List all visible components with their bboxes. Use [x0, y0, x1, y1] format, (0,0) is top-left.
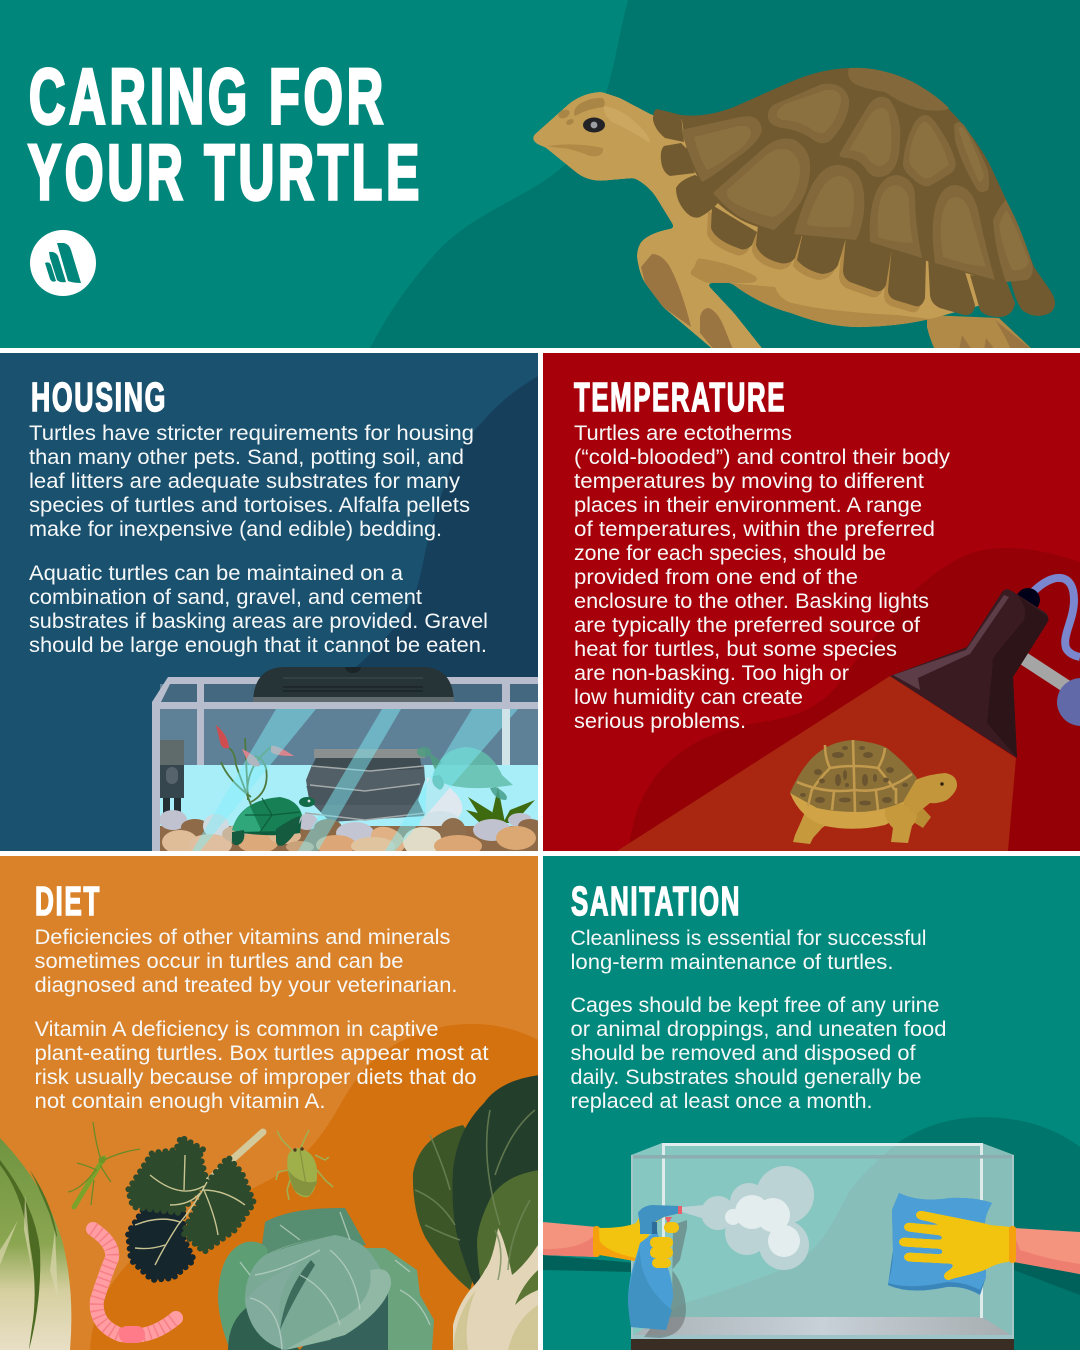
fingers — [650, 1222, 679, 1268]
lamp arm — [1020, 652, 1075, 696]
lamp cord — [1033, 578, 1080, 657]
tortoise head, neck and body — [533, 92, 1000, 352]
diet text block: Deficiencies of other vitamins and minerals — [34, 926, 450, 949]
tortoise limbs — [793, 806, 830, 844]
title: CARING FOR — [29, 52, 387, 140]
bok choy back leaf — [452, 1075, 540, 1303]
aquarium front frame — [152, 702, 538, 851]
illustration: glass tank — [631, 1143, 1014, 1350]
shell — [681, 68, 1034, 282]
small tortoise — [790, 740, 957, 844]
panel: diet — [0, 856, 540, 1350]
rock cave — [305, 749, 425, 822]
sanitation background shape — [640, 1117, 1080, 1350]
temperature background shape — [630, 548, 1080, 851]
panel: housing — [0, 353, 542, 858]
housing text block: should be large enough that it cannot be eaten. — [29, 634, 487, 657]
aquarium back glass — [160, 684, 538, 765]
bottle shadow — [644, 1220, 687, 1338]
spray bottle with gloved hand — [543, 1205, 687, 1338]
fern — [466, 787, 535, 823]
housing text block: make for inexpensive (and edible) bedding. — [29, 518, 442, 541]
diet text block: not contain enough vitamin A. — [34, 1090, 326, 1113]
sanitation text block: should be removed and disposed of — [570, 1042, 916, 1065]
temperature text block: are non-basking. Too high or — [574, 662, 849, 685]
table — [631, 1339, 1014, 1350]
lamp shade — [890, 589, 1048, 758]
bok choy front leaf — [477, 1170, 540, 1310]
cleaning cloth — [888, 1193, 992, 1295]
right gloved hand — [903, 1215, 1080, 1279]
eye — [583, 118, 605, 132]
tortoise head — [903, 773, 957, 815]
lamp joint — [1057, 678, 1080, 726]
illustration: napa cabbage — [0, 1138, 71, 1350]
right post highlight — [502, 709, 510, 765]
diet text block: Vitamin A deficiency is common in captive — [34, 1018, 438, 1041]
right arm shadow — [1014, 1255, 1080, 1295]
glove palm and fingers — [903, 1215, 1012, 1279]
kale upper leaves — [128, 1137, 207, 1213]
tank floor — [631, 1317, 1014, 1337]
teal turtle behind glass — [417, 747, 513, 800]
housing text block: species of turtles and tortoises. Alfalfa pellets — [29, 494, 470, 517]
tank glass body — [631, 1143, 1014, 1339]
marginal scute shadows — [707, 211, 922, 312]
light beams — [192, 709, 518, 851]
shell scutes inner — [694, 90, 1029, 270]
tortoise shell — [790, 740, 917, 812]
left arm shadow — [543, 1255, 636, 1272]
temperature text block: zone for each species, should be — [574, 542, 886, 565]
temperature text block: heat for turtles, but some species — [574, 638, 897, 661]
diet text block — [34, 926, 489, 1113]
sanitation text block: Cleanliness is essential for successful — [570, 927, 926, 950]
temperature text block: low humidity can create — [574, 686, 803, 709]
glove cuff — [1009, 1226, 1016, 1263]
green turtle — [232, 797, 315, 846]
temperature text block: Turtles are ectotherms — [574, 422, 792, 445]
diet text block: diagnosed and treated by your veterinarian. — [34, 974, 458, 997]
illustration: large tortoise — [533, 68, 1055, 352]
sanitation text block: daily. Substrates should generally be — [570, 1066, 922, 1089]
sanitation text block: long-term maintenance of turtles. — [570, 951, 894, 974]
aquarium back frame — [152, 677, 538, 765]
bottle body — [628, 1230, 673, 1330]
housing text block: Turtles have stricter requirements for housing — [29, 422, 474, 445]
sanitation text block: Cages should be kept free of any urine — [570, 994, 940, 1017]
bottle head — [638, 1205, 680, 1234]
spray cloud — [682, 1166, 814, 1270]
kale stem — [207, 1132, 263, 1182]
illustration: kale leaf — [128, 1132, 263, 1280]
header panel — [0, 0, 1080, 352]
housing text block: Aquatic turtles can be maintained on a — [29, 562, 403, 585]
heat lamp — [890, 578, 1080, 758]
temperature text block — [574, 422, 951, 733]
lamp light beam — [617, 676, 1016, 851]
white rocks — [420, 778, 462, 826]
aquarium lamp hood — [253, 667, 454, 702]
illustration: earthworm — [93, 1229, 176, 1343]
lamp socket — [1016, 588, 1040, 612]
diet text block: plant-eating turtles. Box turtles appear most at — [34, 1042, 489, 1065]
right arm — [1014, 1228, 1080, 1274]
tank frame — [631, 1143, 1014, 1339]
temperature text block: provided from one end of the — [574, 566, 858, 589]
temperature text block: (“cold-blooded”) and control their body — [574, 446, 951, 469]
temperature text block: enclosure to the other. Basking lights — [574, 590, 929, 613]
temperature text block: temperatures by moving to different — [574, 470, 924, 493]
tortoise shell spots — [800, 746, 908, 805]
sanitation text block — [570, 927, 946, 1113]
housing text block: leaf litters are adequate substrates for many — [29, 470, 461, 493]
illustration: grasshopper — [68, 1122, 140, 1207]
illustration: cabbage — [218, 1208, 434, 1350]
housing heading: HOUSING — [31, 374, 167, 420]
illustration: stink bug — [276, 1130, 333, 1200]
diet text block: sometimes occur in turtles and can be — [34, 950, 404, 973]
marginal scutes — [653, 109, 1055, 317]
temperature text block: serious problems. — [574, 710, 746, 733]
illustration: bok choy — [413, 1075, 540, 1350]
title — [26, 67, 418, 202]
diet background shape — [90, 1024, 538, 1350]
tortoise rear leg — [927, 316, 1031, 348]
panel: temperature — [543, 353, 1080, 851]
bok choy bulb — [453, 1228, 538, 1350]
housing background shape — [356, 376, 538, 677]
header background shape — [370, 0, 1080, 348]
rear leg shading and toes — [960, 320, 1030, 348]
glove — [599, 1207, 666, 1262]
kale lower dark leaf — [128, 1207, 194, 1280]
gravel — [160, 810, 538, 851]
temperature text block: of temperatures, within the preferred — [574, 518, 935, 541]
shell scutes outer — [681, 68, 1033, 282]
kale veins — [135, 1155, 245, 1265]
front leg shading — [641, 254, 691, 327]
housing text block — [29, 422, 488, 657]
glove cuff — [593, 1226, 600, 1257]
left arm — [543, 1222, 597, 1257]
housing text block: combination of sand, gravel, and cement — [29, 586, 422, 609]
aquatic plant — [216, 725, 294, 805]
housing text block: than many other pets. Sand, potting soil, and — [29, 446, 464, 469]
water — [160, 765, 538, 826]
diet text block: risk usually because of improper diets that do — [34, 1066, 476, 1089]
sanitation text block: or animal droppings, and uneaten food — [570, 1018, 946, 1041]
filter — [160, 740, 184, 815]
head details — [547, 144, 603, 156]
diet heading: DIET — [35, 878, 101, 924]
temperature text block: are typically the preferred source of — [574, 614, 920, 637]
tortoise belly shading — [731, 283, 930, 327]
panel: sanitation — [543, 856, 1080, 1350]
housing text block: substrates if basking areas are provided. Gravel — [29, 610, 488, 633]
logo — [30, 230, 96, 296]
title: YOUR TURTLE — [28, 128, 423, 216]
bok choy left leaf — [413, 1125, 500, 1290]
sanitation text block: replaced at least once a month. — [570, 1090, 872, 1113]
temperature text block: places in their environment. A range — [574, 494, 922, 517]
illustration: aquarium with turtles — [152, 667, 542, 858]
tortoise shell seams — [797, 740, 912, 812]
sanitation heading: SANITATION — [571, 878, 741, 924]
temperature heading: TEMPERATURE — [574, 374, 786, 420]
